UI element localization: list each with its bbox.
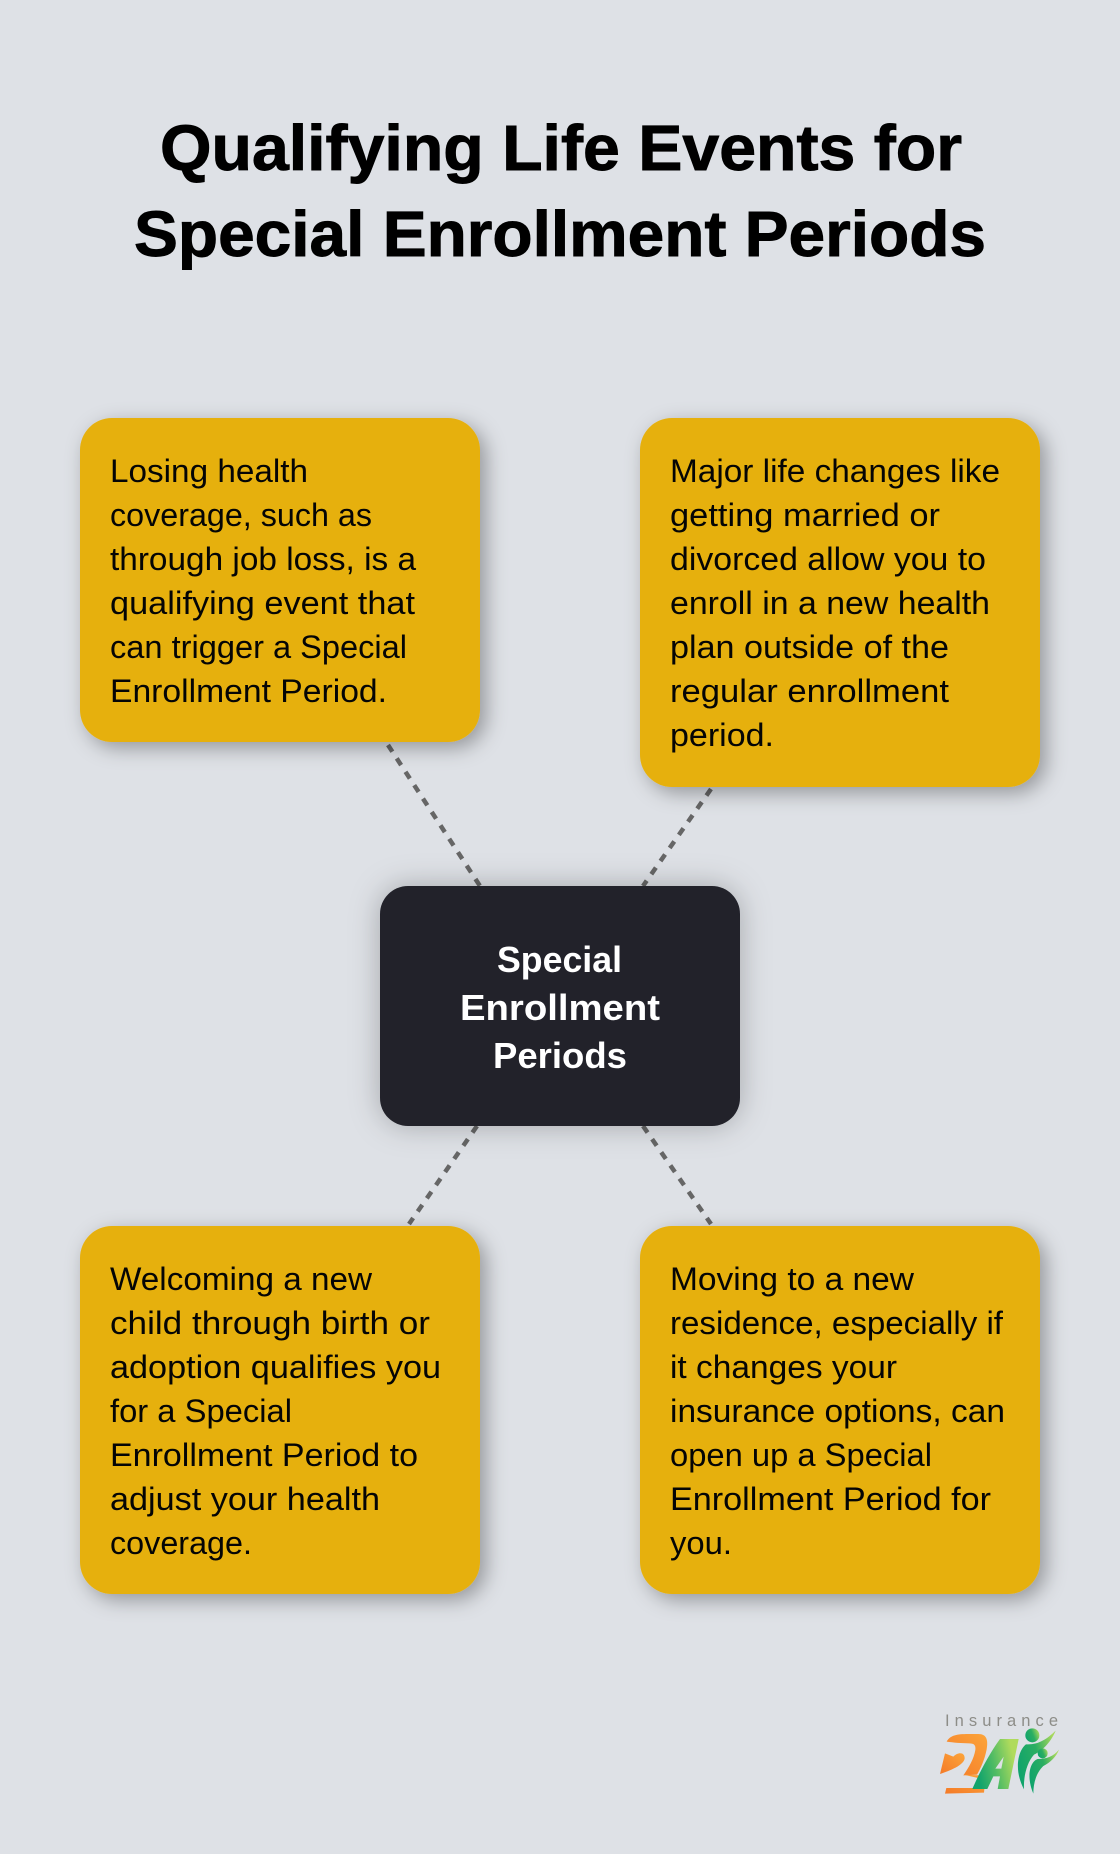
title: Qualifying Life Events for bbox=[160, 112, 962, 184]
logo mark bbox=[940, 1728, 1059, 1794]
panel: new child bbox=[80, 1226, 480, 1594]
card text bbox=[110, 1261, 441, 1561]
connector: bottom right bbox=[643, 1126, 711, 1224]
card text: Enrollment Period. bbox=[110, 673, 387, 709]
card text: you. bbox=[670, 1525, 732, 1561]
card text: Losing health bbox=[110, 453, 308, 489]
panel: losing health coverage bbox=[80, 418, 480, 742]
card text: qualifying event that bbox=[110, 585, 415, 621]
card background bbox=[80, 1226, 480, 1594]
card text: Welcoming a new bbox=[110, 1261, 373, 1297]
card text bbox=[670, 453, 1000, 753]
card background bbox=[640, 418, 1040, 787]
card text bbox=[670, 1261, 1005, 1561]
card text: plan outside of the bbox=[670, 629, 949, 665]
hub label: Periods bbox=[493, 1035, 627, 1076]
hub label: Special bbox=[497, 939, 622, 980]
card text: can trigger a Special bbox=[110, 629, 407, 665]
hub background bbox=[380, 886, 740, 1126]
hub label bbox=[460, 939, 660, 1076]
card text: Major life changes like bbox=[670, 453, 1000, 489]
card text: Moving to a new bbox=[670, 1261, 915, 1297]
card text: coverage, such as bbox=[110, 497, 372, 533]
title: Special Enrollment Periods bbox=[134, 198, 986, 270]
card text: through job loss, is a bbox=[110, 541, 416, 577]
hub label: Enrollment bbox=[460, 987, 660, 1028]
card text: divorced allow you to bbox=[670, 541, 986, 577]
card text: residence, especially if bbox=[670, 1305, 1003, 1341]
card text: Enrollment Period for bbox=[670, 1481, 991, 1517]
title bbox=[134, 112, 986, 270]
connector: top right bbox=[643, 789, 711, 886]
card text: Enrollment Period to bbox=[110, 1437, 418, 1473]
connector: bottom left bbox=[409, 1126, 477, 1224]
panel: moving residence bbox=[640, 1226, 1040, 1594]
card text: open up a Special bbox=[670, 1437, 932, 1473]
card text: regular enrollment bbox=[670, 673, 949, 709]
logo wordmark: Insurance bbox=[945, 1712, 1061, 1730]
logo: Insurance2Ai bbox=[940, 1712, 1061, 1794]
card text: period. bbox=[670, 717, 774, 753]
card background bbox=[80, 418, 480, 742]
card text bbox=[110, 453, 416, 709]
card text: for a Special bbox=[110, 1393, 292, 1429]
panel: center hub bbox=[380, 886, 740, 1126]
card text: adoption qualifies you bbox=[110, 1349, 441, 1385]
card text: it changes your bbox=[670, 1349, 897, 1385]
card text: getting married or bbox=[670, 497, 940, 533]
connector: top left bbox=[388, 745, 480, 886]
card text: enroll in a new health bbox=[670, 585, 990, 621]
panel: major life changes bbox=[640, 418, 1040, 787]
card text: child through birth or bbox=[110, 1305, 430, 1341]
card text: adjust your health bbox=[110, 1481, 380, 1517]
card text: insurance options, can bbox=[670, 1393, 1005, 1429]
card background bbox=[640, 1226, 1040, 1594]
card text: coverage. bbox=[110, 1525, 252, 1561]
